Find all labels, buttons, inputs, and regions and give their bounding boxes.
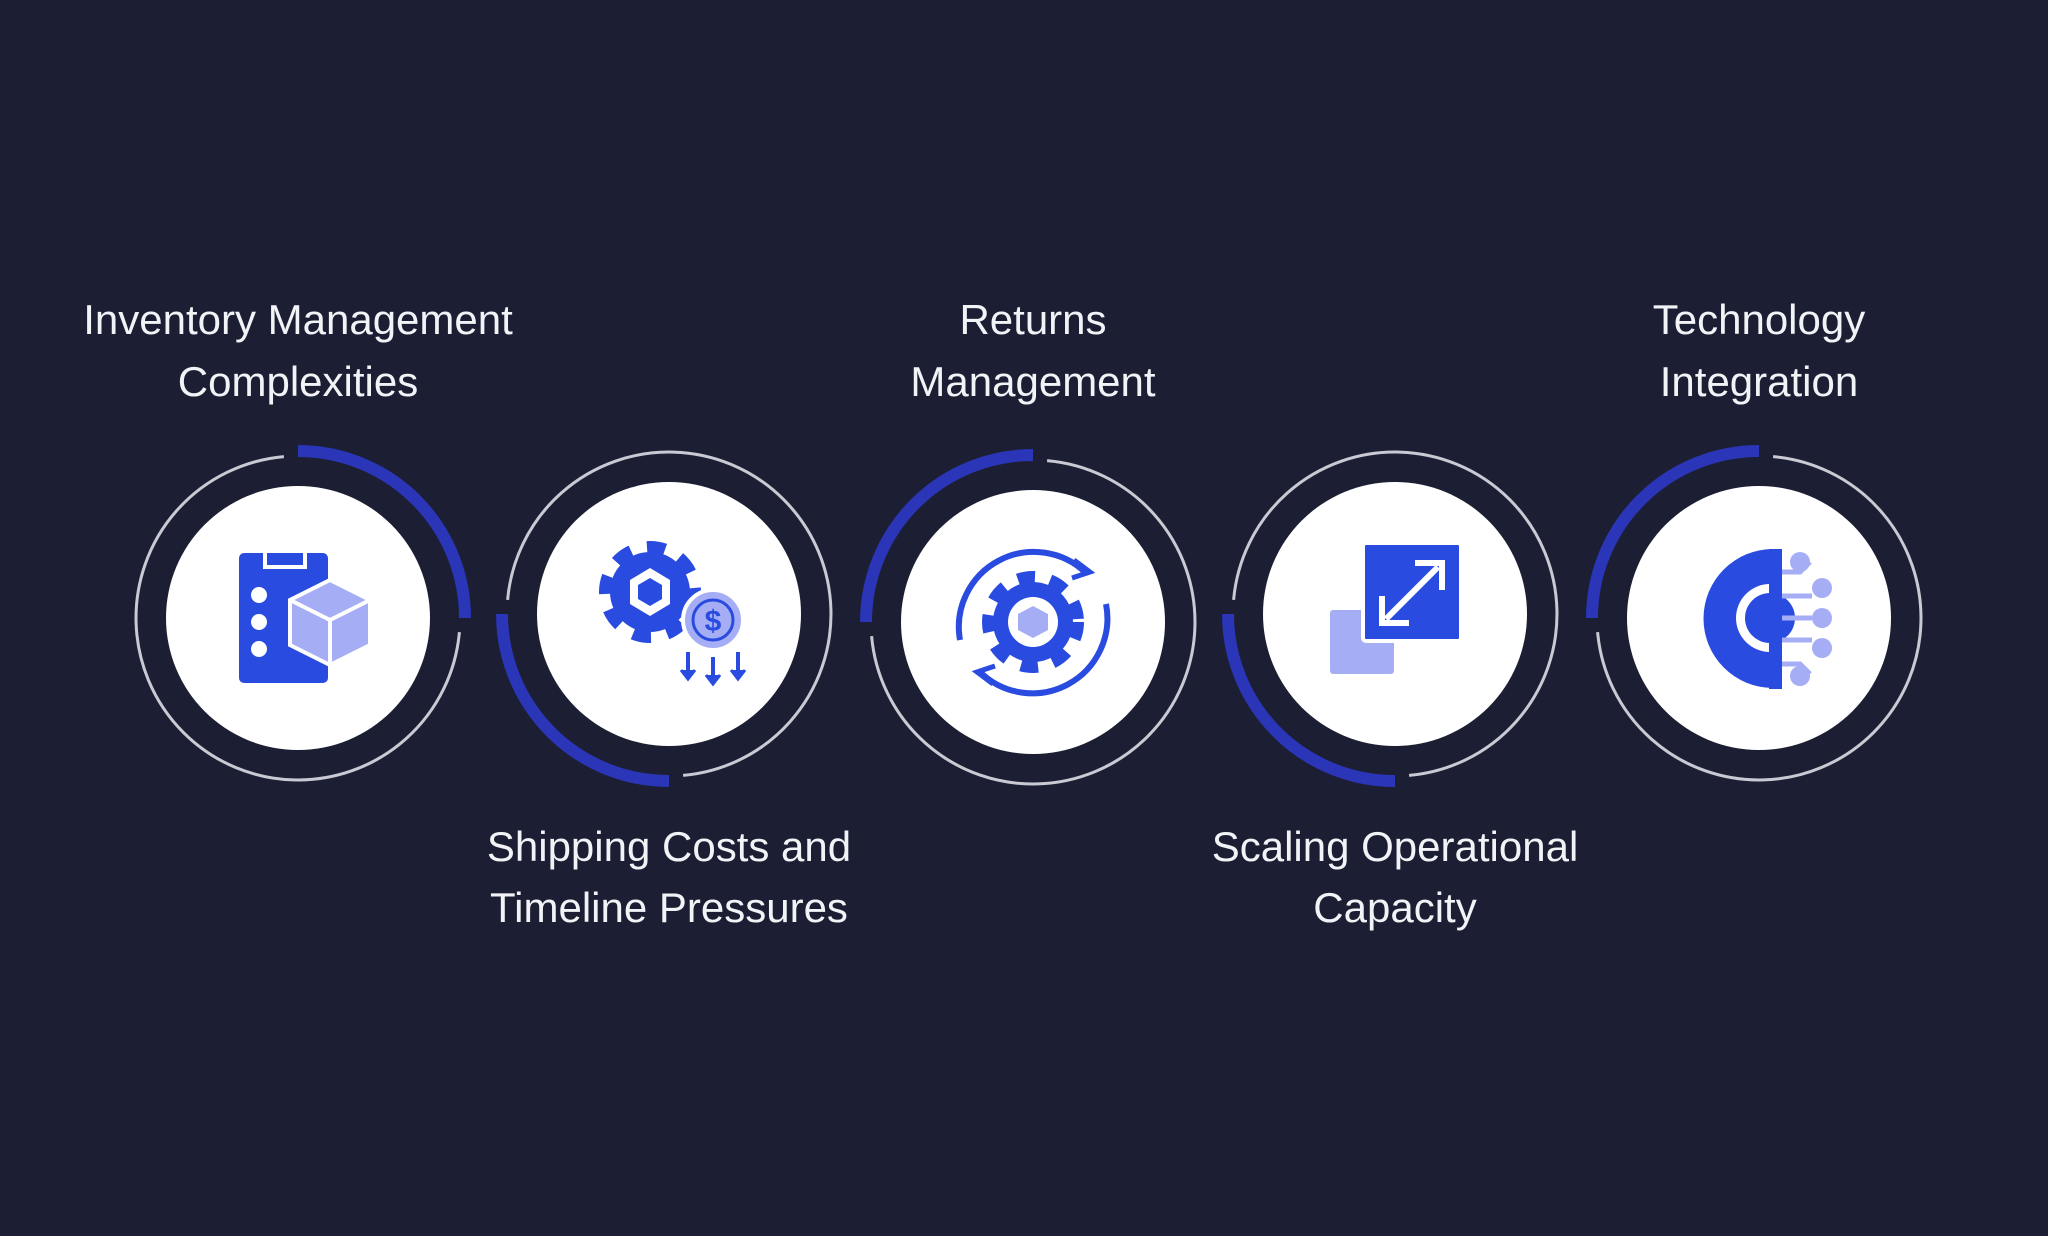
circle 1: inventory xyxy=(136,451,465,780)
label: Returns Management xyxy=(910,296,1156,405)
label: Scaling Operational Capacity: Scaling Operational xyxy=(1212,823,1578,870)
label: Returns Management: Returns xyxy=(959,296,1107,343)
label: Technology Integration: Integration xyxy=(1660,358,1858,405)
label: Scaling Operational Capacity xyxy=(1212,823,1578,931)
circle 5: technology xyxy=(1592,451,1921,780)
circle 3: returns xyxy=(866,455,1195,784)
label: Shipping Costs and Timeline Pressures: Shipping Costs and xyxy=(487,823,851,870)
icon: scaling squares xyxy=(1330,543,1461,674)
circle 4: scaling xyxy=(1228,452,1557,781)
label: Shipping Costs and Timeline Pressures: Timeline Pressures xyxy=(490,884,848,931)
label: Scaling Operational Capacity: Capacity xyxy=(1313,884,1477,931)
label: Technology Integration: Technology xyxy=(1653,296,1865,343)
label: Inventory Management Complexities: Complexities xyxy=(178,358,418,405)
label: Inventory Management Complexities xyxy=(83,296,513,405)
circle 2: shipping xyxy=(502,452,831,781)
icon: clipboard with box xyxy=(239,553,370,683)
icon: gear with circuit xyxy=(1704,549,1832,689)
label: Inventory Management Complexities: Inventory Management xyxy=(83,296,513,343)
icon: gear with coin xyxy=(606,548,745,684)
icon: gear with circular arrows xyxy=(959,552,1107,693)
label: Returns Management: Management xyxy=(910,358,1156,405)
label: Shipping Costs and Timeline Pressures xyxy=(487,823,851,931)
label: Technology Integration xyxy=(1653,296,1865,405)
icon: gear with coin: $ xyxy=(705,605,722,638)
